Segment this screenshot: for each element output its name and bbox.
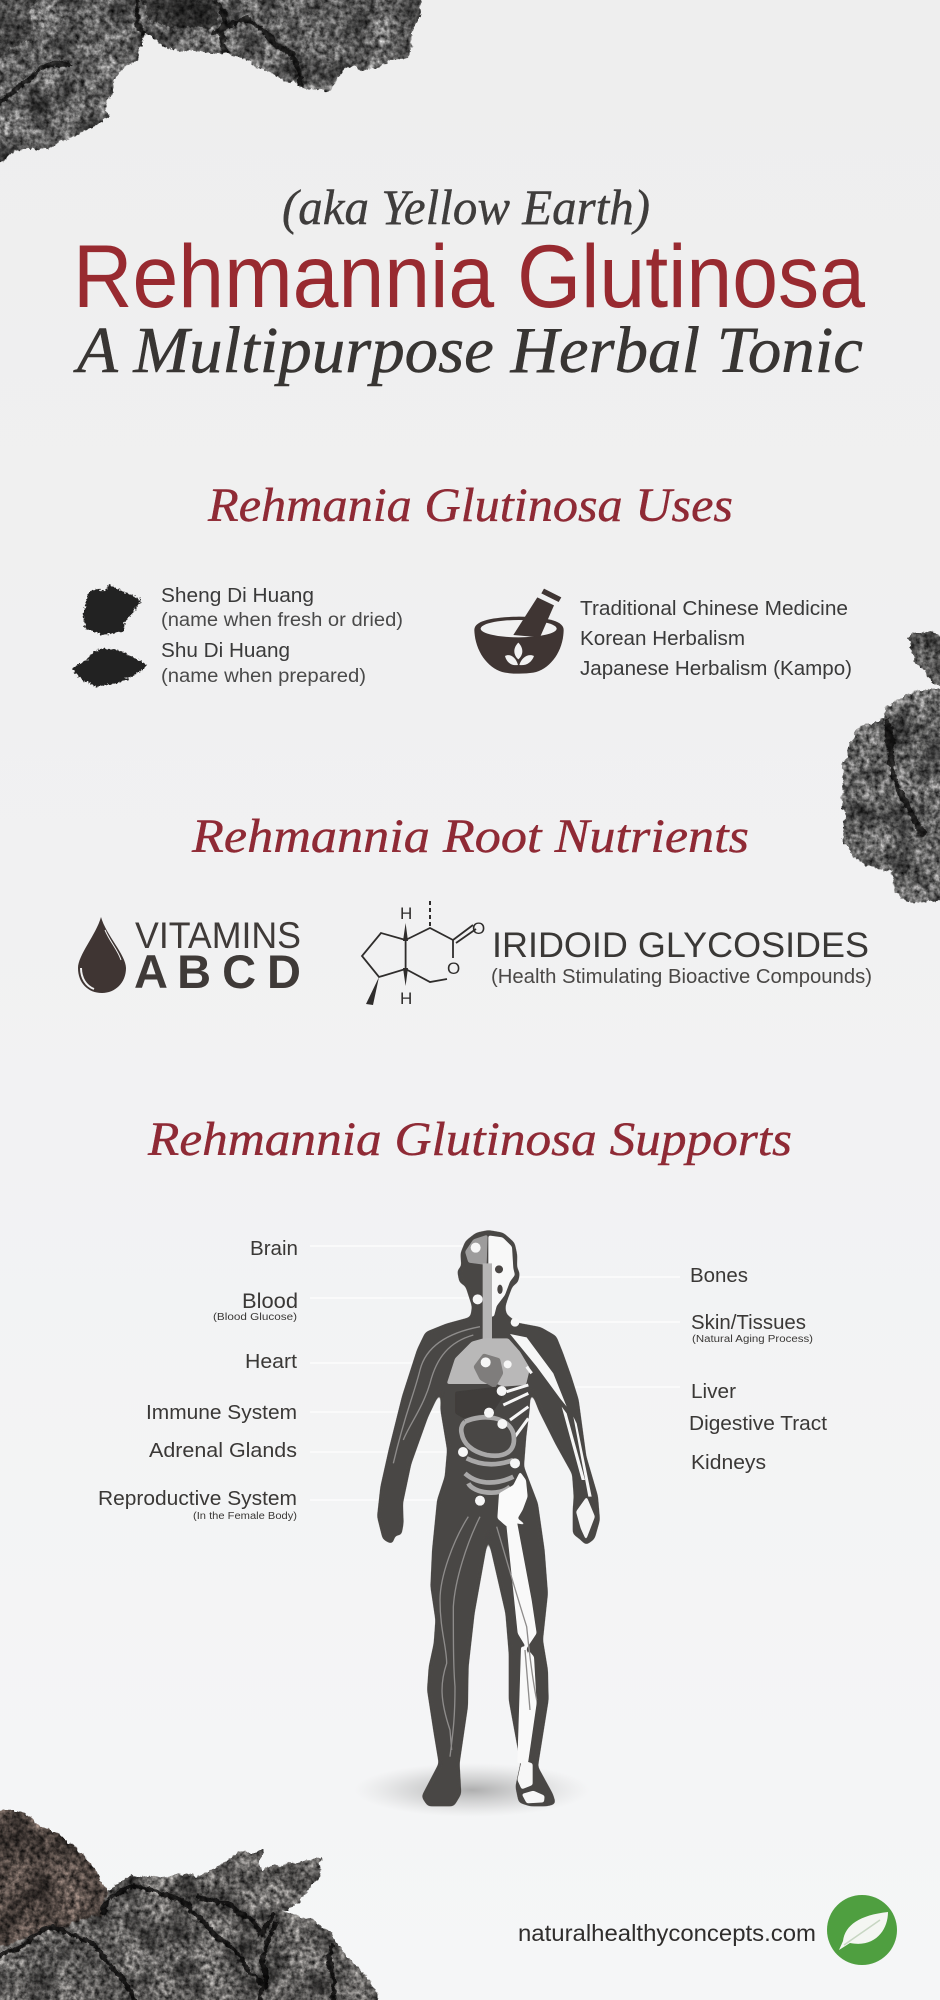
tradition: japanese: Japanese Herbalism (Kampo) [580, 658, 852, 680]
title [73, 179, 865, 387]
icon: iridoid molecule: O [447, 959, 460, 978]
note: prepared: (name when prepared) [161, 666, 366, 687]
skull nose and jaw hollow [497, 1285, 503, 1294]
marker points [471, 1243, 481, 1253]
rock: top left [0, 0, 425, 185]
note: natural aging: (Natural Aging Process) [692, 1334, 813, 1345]
skull [488, 1235, 515, 1317]
vein lines [393, 1327, 480, 1463]
label: brain: Brain [250, 1238, 298, 1260]
connector lines [310, 1246, 680, 1500]
name: sheng di huang: Sheng Di Huang [161, 585, 314, 607]
rock: bottom left [0, 1812, 378, 2000]
shadow under feet [354, 1763, 590, 1817]
icon: iridoid molecule: H [400, 989, 412, 1008]
label: immune system: Immune System [146, 1402, 297, 1424]
pelvis and hip [497, 1472, 528, 1527]
organ marker dots [458, 1243, 520, 1506]
label: bones: Bones [690, 1265, 748, 1287]
label: adrenal glands: Adrenal Glands [149, 1440, 297, 1462]
website url: naturalhealthyconcepts.com [518, 1920, 816, 1946]
icon: iridoid molecule: H [400, 904, 412, 923]
note: blood glucose: (Blood Glucose) [213, 1312, 297, 1323]
heading: nutrients: Rehmannia Root Nutrients [191, 810, 749, 863]
heart [473, 1353, 503, 1388]
rib bones [503, 1367, 532, 1437]
labels: left [98, 1238, 298, 1522]
icon: leaf logo [827, 1895, 897, 1965]
label: heart: Heart [245, 1351, 297, 1373]
spine and windpipe [483, 1263, 492, 1347]
right arm bones [510, 1334, 592, 1497]
rock: right edge [842, 632, 940, 905]
brain [465, 1235, 488, 1265]
right leg bones [506, 1520, 537, 1763]
icon: vitamin drop [78, 917, 126, 993]
vitamins word: VITAMINS [135, 915, 301, 956]
label: reproductive system: Reproductive System [98, 1488, 297, 1510]
text: traditions [580, 598, 852, 680]
note: fresh or dried: (name when fresh or dried) [161, 610, 403, 631]
intestine loops [461, 1417, 514, 1493]
icon: dried root piece [83, 585, 142, 635]
heading: supports: Rehmannia Glutinosa Supports [147, 1113, 792, 1166]
icon: mortar and pestle [474, 589, 564, 674]
iridoid note: (Health Stimulating Bioactive Compounds) [491, 966, 872, 988]
digestive tract [461, 1417, 514, 1493]
label: blood: Blood [242, 1290, 298, 1313]
icon: iridoid molecule: O [472, 919, 485, 938]
lungs [447, 1338, 530, 1387]
right hand bones [576, 1497, 595, 1540]
labels: right [689, 1265, 827, 1474]
title: subtitle: A Multipurpose Herbal Tonic [73, 314, 863, 387]
heading: uses: Rehmania Glutinosa Uses [207, 479, 733, 532]
title: main heading: Rehmannia Glutinosa [73, 226, 865, 326]
name: shu di huang: Shu Di Huang [161, 640, 290, 662]
right foot bones [517, 1760, 545, 1803]
text: names [161, 585, 403, 687]
veins [393, 1327, 537, 1757]
label: skin and tissues: Skin/Tissues [691, 1312, 806, 1334]
label: liver: Liver [691, 1381, 736, 1403]
icon: iridoid molecule [362, 901, 485, 1008]
text: vitamins [134, 915, 301, 998]
text: iridoid glycosides [491, 926, 872, 988]
label: kidneys: Kidneys [691, 1452, 766, 1474]
vitamin letters: A B C D [134, 945, 301, 998]
tradition: korean: Korean Herbalism [580, 628, 745, 650]
ribs [503, 1367, 532, 1437]
label: digestive tract: Digestive Tract [689, 1413, 827, 1435]
icon: prepared powder [72, 648, 147, 687]
body silhouette [377, 1230, 600, 1806]
iridoid title: IRIDOID GLYCOSIDES [492, 926, 869, 965]
tradition: chinese: Traditional Chinese Medicine [580, 598, 848, 620]
skull eye socket [495, 1265, 503, 1273]
title: aka line: (aka Yellow Earth) [282, 179, 650, 235]
note: female body: (In the Female Body) [193, 1511, 297, 1522]
human body diagram [377, 1230, 600, 1806]
liver [455, 1387, 503, 1418]
